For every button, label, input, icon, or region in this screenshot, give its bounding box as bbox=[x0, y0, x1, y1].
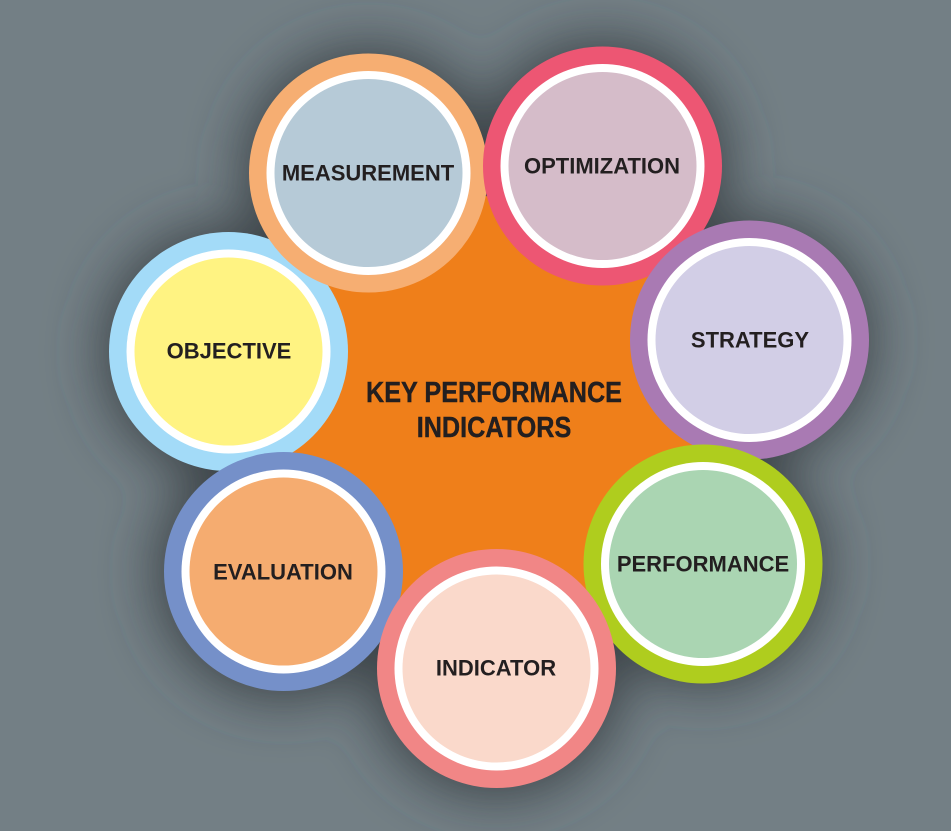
circle: indicator: INDICATOR bbox=[436, 656, 556, 680]
circle: indicator bbox=[377, 549, 616, 788]
central orange hub bbox=[272, 196, 716, 640]
title bbox=[366, 375, 622, 443]
circle: strategy bbox=[630, 220, 869, 460]
circle: performance bbox=[584, 444, 822, 684]
circle: optimization: OPTIMIZATION bbox=[524, 154, 680, 178]
circle: measurement: MEASUREMENT bbox=[282, 160, 455, 186]
circle: optimization bbox=[483, 46, 722, 286]
circle: strategy: STRATEGY bbox=[691, 328, 809, 352]
title: INDICATORS bbox=[417, 410, 571, 443]
circle: measurement bbox=[249, 54, 488, 292]
title: KEY PERFORMANCE bbox=[366, 375, 622, 408]
circle: evaluation: EVALUATION bbox=[213, 560, 353, 584]
circle: objective bbox=[109, 232, 348, 471]
circle: evaluation bbox=[164, 452, 403, 691]
circle: objective: OBJECTIVE bbox=[167, 338, 291, 364]
circle: performance: PERFORMANCE bbox=[617, 552, 789, 576]
